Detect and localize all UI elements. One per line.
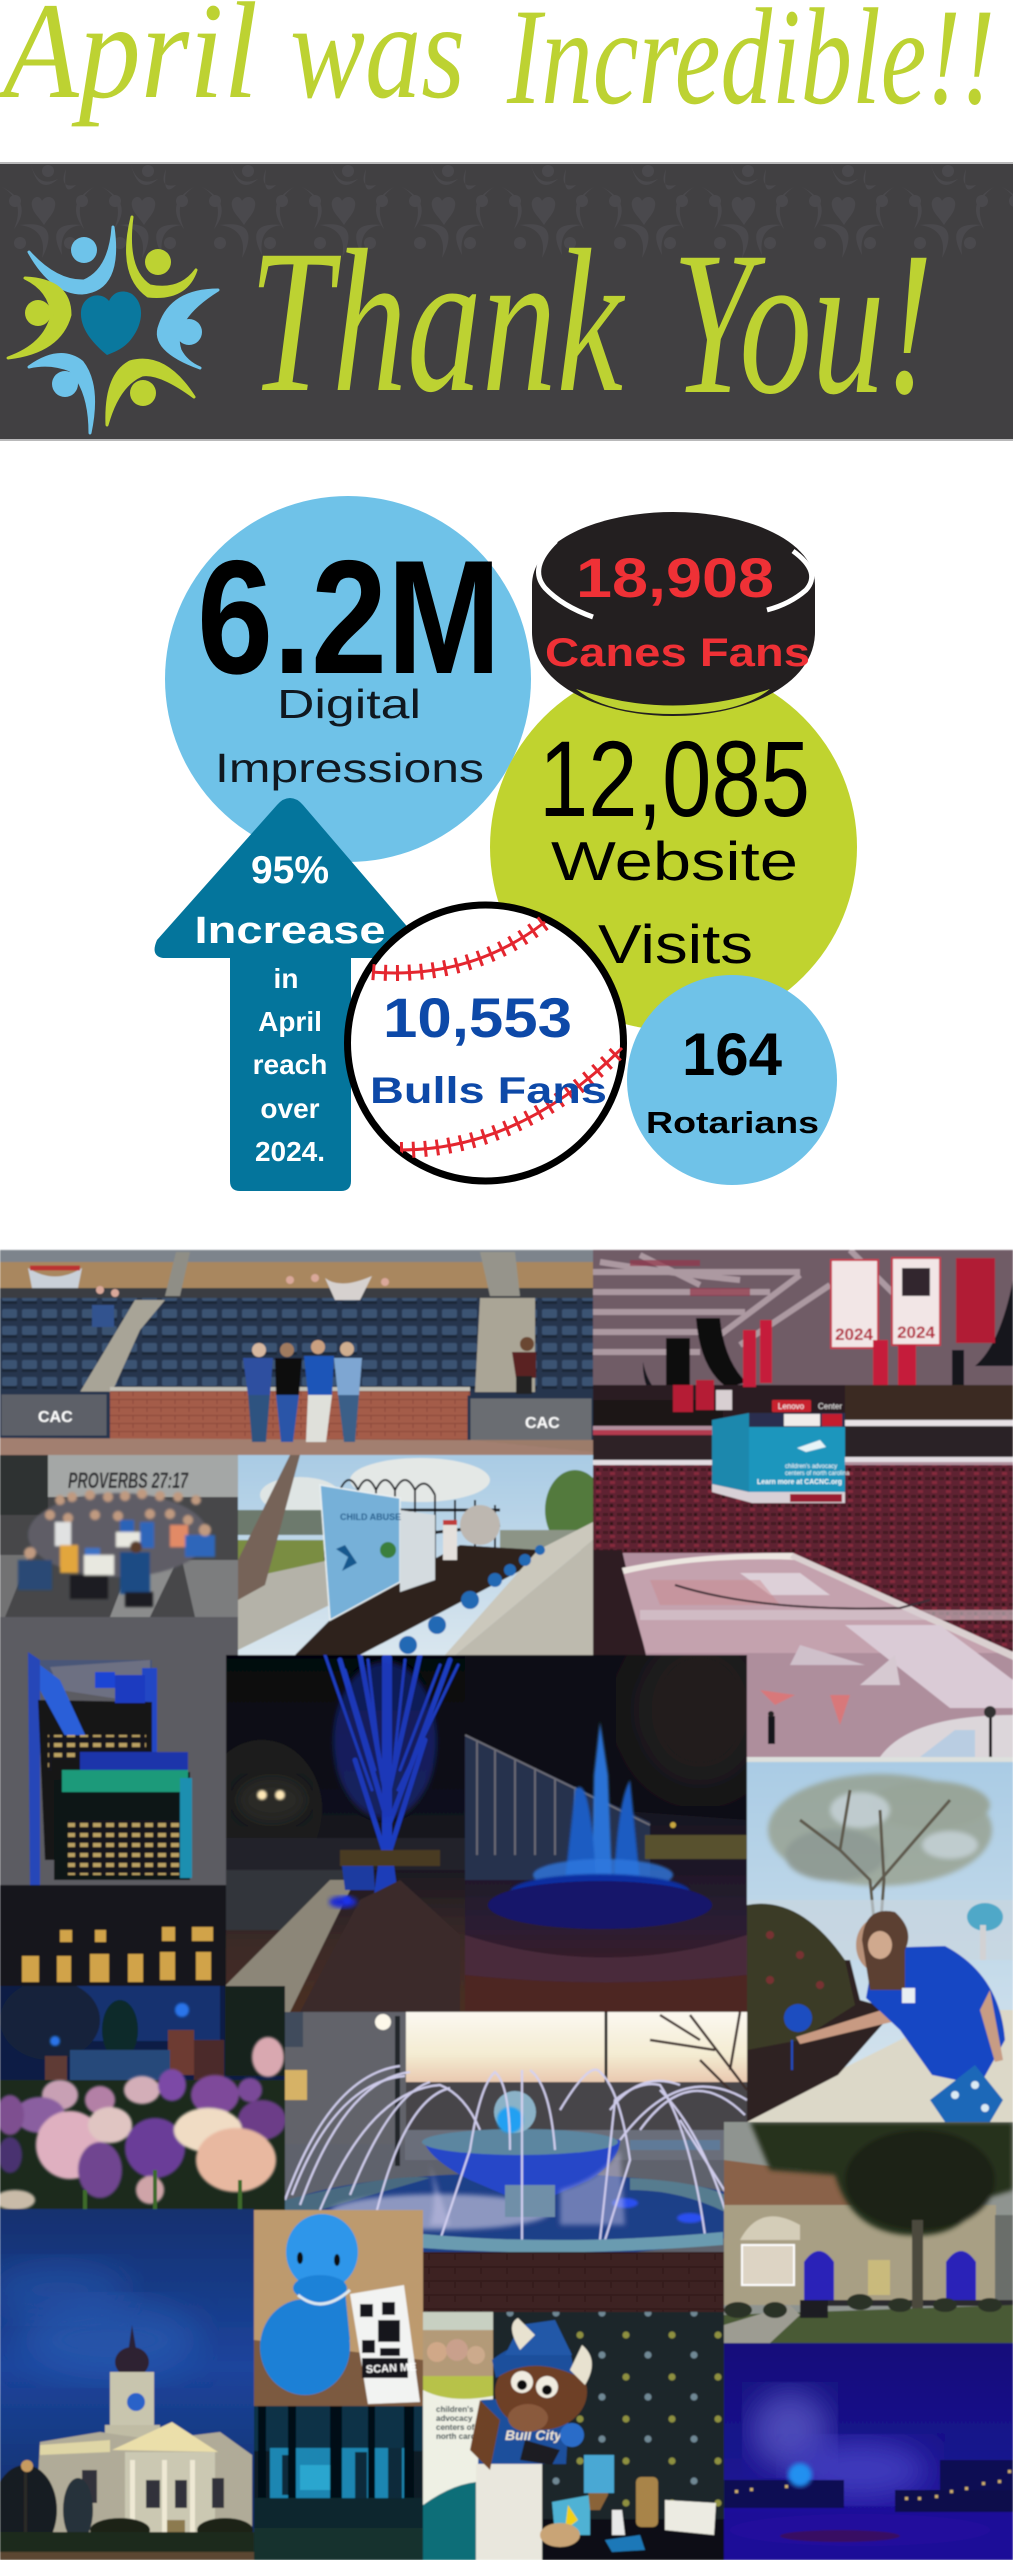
sub: CACNC pull-up banner: centers of <box>436 2423 475 2432</box>
photo: pinwheel sign garden: CHILD ABUSE <box>340 1512 401 1522</box>
sub: CACNC pull-up banner <box>423 2312 493 2560</box>
sub: CACNC pull-up banner: children's <box>436 2405 474 2414</box>
arrow: 95 percent increase: Increase <box>194 910 386 952</box>
panel: photo collage <box>0 1250 1013 2560</box>
sub: championship banners: 2024 <box>897 1323 935 1342</box>
sub: bull mascot <box>470 2318 592 2560</box>
sub: trees lamp and ground <box>0 2465 57 2555</box>
arrow: 95 percent increase: in <box>274 963 298 994</box>
sub: sidewalk and shrubs <box>747 2010 1013 2122</box>
photo: arena jumbotron and rink <box>592 1249 1013 1758</box>
photo: stadium group <box>0 1249 594 1456</box>
sub: championship banners: 2024 <box>835 1325 873 1344</box>
sub: dark building with warm windows <box>0 1885 226 1986</box>
sub: bull mascot: Bull City <box>505 2427 563 2443</box>
heading: thank you: Thank <box>249 208 625 435</box>
sub: woman in blue <box>784 1911 1005 2122</box>
sub: brick base <box>423 2232 723 2252</box>
sub: CACNC pull-up banner: north carolina <box>436 2432 490 2441</box>
stat: rotarians circle: Rotarians <box>646 1105 819 1140</box>
arrow: 95 percent increase: reach <box>253 1049 327 1080</box>
stat: digital impressions circle: Digital <box>277 681 421 727</box>
sub: rink ice <box>622 1553 1013 1757</box>
title <box>0 0 995 133</box>
sub: group of people <box>18 1489 215 1607</box>
photo: Bull City mascot at table <box>422 2310 726 2560</box>
stat: hockey puck canes fans <box>532 512 815 716</box>
sub: CACNC pull-up banner: advocacy <box>436 2414 473 2423</box>
icon: logo with six figures around a heart <box>8 217 218 433</box>
stat: digital impressions circle <box>165 496 531 862</box>
sub: crowd in red seats <box>593 1465 1013 1660</box>
panel: statistics cluster <box>155 496 857 1191</box>
sub: championship banners <box>673 1258 995 1412</box>
sub: child abuse prevention sign <box>320 1485 400 1620</box>
photo: blue rubber duck with QR tag: SCAN ME <box>366 2361 417 2376</box>
photo: blue rubber duck with QR tag <box>252 2208 424 2408</box>
stat: rotarians circle <box>627 975 837 1185</box>
photo: courthouse at night <box>0 2208 256 2560</box>
stat: website visits circle: 12,085 <box>539 718 810 839</box>
photo: house with blue doors <box>722 2121 1013 2344</box>
photo: stadium group: CAC <box>38 1409 73 1426</box>
photo: gym group <box>0 1454 239 1618</box>
panel: thank you banner <box>0 162 1013 441</box>
sub: pool and rim <box>275 2173 765 2257</box>
photo: lit tower in blue <box>0 1616 239 1988</box>
photo: blue tree at night <box>225 1654 466 2013</box>
sub: skyline lights <box>724 2460 1013 2512</box>
stat: hockey puck canes fans: Canes Fans <box>545 631 810 675</box>
sub: tree foliage and lawn <box>750 2122 1013 2236</box>
stat: website visits circle: Visits <box>598 913 753 975</box>
arrow: 95 percent increase: April <box>258 1006 322 1037</box>
sub: tulip blooms <box>0 2037 286 2210</box>
sub: upper crowd and ring lines <box>593 1385 1013 1465</box>
photo: stadium group: CAC <box>525 1415 560 1432</box>
stat: website visits circle <box>490 664 857 1030</box>
arrow: 95 percent increase: 2024. <box>255 1136 325 1167</box>
stat: hockey puck canes fans: 18,908 <box>576 546 774 609</box>
sub: jumbotron with CACNC message: centers of north carolina <box>785 1471 850 1477</box>
sub: jumbotron with CACNC message: Lenovo <box>778 1402 805 1411</box>
stat: rotarians circle: 164 <box>682 1021 783 1088</box>
stat: digital impressions circle: Impressions <box>215 745 484 791</box>
photo: blue fountain at night <box>464 1654 748 2013</box>
sub: mulch bed with pinwheels and sidewalk <box>295 1545 550 1655</box>
photo: pinwheel sign garden <box>237 1454 594 1656</box>
sub: jumbotron with CACNC message <box>712 1400 850 1503</box>
sub: tiered fountain bowl <box>423 2132 620 2195</box>
sub: iron fence <box>325 1480 500 1585</box>
sub: arcing water jets <box>285 2066 747 2240</box>
stat: website visits circle: Website <box>551 830 798 892</box>
sub: jumbotron with CACNC message: children's advocacy <box>785 1464 837 1470</box>
photo: teal lit building among trees <box>252 2405 424 2560</box>
sub: clock tower <box>105 2325 160 2441</box>
arrow: 95 percent increase: 95% <box>251 849 329 892</box>
sub: illuminated blue water jets <box>510 1722 690 1910</box>
sub: jumbotron with CACNC message: Learn more at CACNC.org <box>757 1477 842 1486</box>
stat: digital impressions circle: 6.2M <box>197 527 501 708</box>
stat: baseball bulls fans <box>348 905 624 1181</box>
arrow: 95 percent increase <box>155 798 423 1191</box>
sub: blue lit bare tree <box>325 1655 458 1900</box>
sub: QR tag <box>350 2285 420 2404</box>
stat: baseball bulls fans: 10,553 <box>383 986 572 1049</box>
photo: blue night scene with smoke <box>722 2342 1013 2560</box>
photo: tulips at dusk <box>0 1984 286 2211</box>
photo: tree and woman placing pinwheels <box>746 1756 1013 2123</box>
sub: jumbotron with CACNC message: Center <box>818 1402 842 1411</box>
arrow: 95 percent increase: over <box>260 1093 320 1124</box>
sub: table with items <box>543 2519 724 2560</box>
stat: baseball bulls fans: Bulls Fans <box>370 1070 607 1111</box>
photo: daytime fountain with purple jets <box>284 2010 748 2314</box>
sub: courthouse building <box>35 2422 252 2542</box>
sub: blue arched doorways <box>804 2251 834 2300</box>
sub: four women seated <box>243 1340 362 1442</box>
sub: sparse tree canopy <box>768 1774 992 1886</box>
